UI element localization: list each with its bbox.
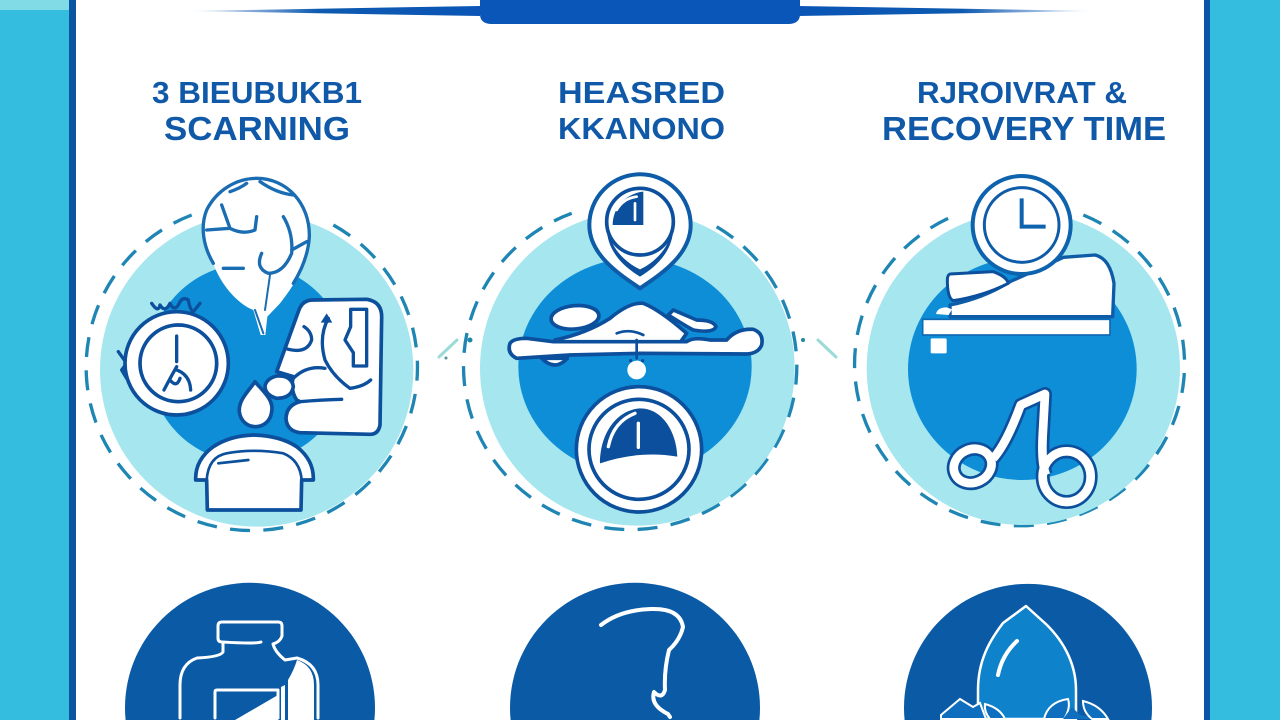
heading: right: [882, 75, 1166, 147]
icon: location pin: [589, 174, 691, 288]
icon: bottle: [180, 622, 318, 720]
panel: left column: [86, 75, 417, 531]
icon: clock: [118, 299, 228, 415]
icon: brain: [203, 178, 309, 335]
icon group: recovery circle: [855, 176, 1185, 526]
icon: gauge: [576, 387, 702, 512]
header bar: [185, 0, 1095, 24]
icon: reclining figure: [509, 303, 762, 365]
arrow: left connector: [439, 338, 472, 360]
icon group: scanning circle: [86, 178, 417, 531]
heading: centre: HEASRED: [558, 75, 725, 110]
panel: bottom icon bottle: [125, 583, 375, 720]
heading: right: RECOVERY TIME: [882, 110, 1166, 147]
icon: small connector bulb: [627, 359, 646, 379]
heading: centre: KKANONO: [558, 111, 725, 146]
heading: left: SCARNING: [164, 110, 350, 147]
icon group: measured circle: [463, 174, 797, 530]
panel: centre column: [463, 75, 797, 530]
heading: right: RJROIVRAT &: [917, 75, 1127, 110]
heading: left: 3 BIEUBUKB1: [152, 75, 362, 110]
arrow: right connector: [801, 338, 836, 357]
heading: left: [152, 75, 362, 147]
panel: right column: [855, 75, 1185, 526]
panel: bottom icon water drop: [904, 584, 1152, 720]
icon: bed with patient: [923, 255, 1114, 353]
panel: bottom icon swoosh: [510, 583, 760, 720]
icon: scan panel with hand: [265, 299, 382, 434]
icon: water drop: [941, 606, 1108, 719]
icon: clock: [973, 176, 1071, 274]
icon: droplet: [239, 382, 272, 427]
icon: person: [196, 435, 313, 510]
icon: curved line: [601, 609, 683, 717]
icon: scissors: [948, 394, 1091, 502]
heading: centre: [558, 75, 725, 146]
